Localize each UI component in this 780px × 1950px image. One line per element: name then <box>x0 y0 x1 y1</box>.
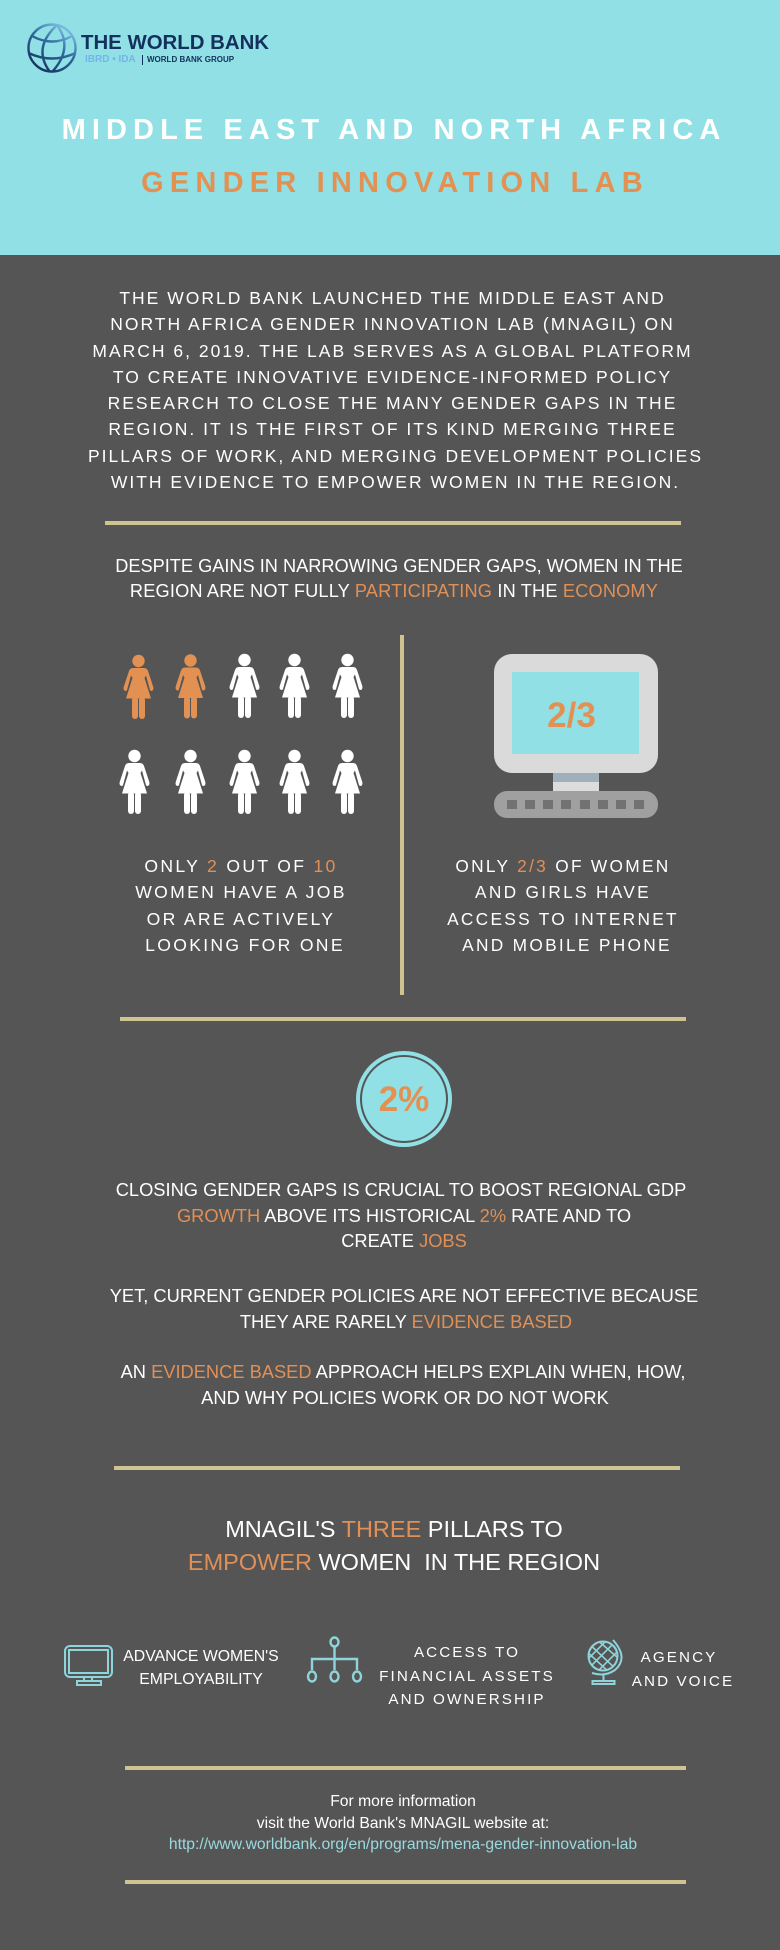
logo: The World Bank <box>27 23 269 73</box>
pillar 1 label: ADVANCE WOMEN'S <box>123 1648 279 1665</box>
pillar 3 label <box>632 1649 734 1690</box>
intro paragraph: PILLARS OF WORK, AND MERGING DEVELOPMENT POLICIES <box>88 446 703 466</box>
intro paragraph <box>88 288 703 492</box>
heading: three pillars: EMPOWER WOMEN IN THE REGION <box>188 1548 600 1574</box>
pillar 3 label: AND VOICE <box>632 1672 734 1690</box>
text: only 2/3 of women: AND MOBILE PHONE <box>462 935 672 955</box>
intro paragraph: REGION. IT IS THE FIRST OF ITS KIND MERGING THREE <box>108 419 677 439</box>
text: only 2 out of 10: ONLY 2 OUT OF 10 <box>144 856 338 876</box>
pillar 2 label <box>379 1644 555 1708</box>
neck <box>553 773 599 791</box>
footer: more information: For more information <box>330 1793 476 1810</box>
icon: org network <box>306 1636 362 1683</box>
icon: desk globe <box>588 1640 622 1685</box>
woman 1 (orange) <box>124 654 154 719</box>
footer: more information: http://www.worldbank.org/en/programs/mena-gender-innovation-lab <box>169 1836 637 1853</box>
separator <box>142 55 143 65</box>
pillar 1 label <box>123 1648 279 1688</box>
pictogram: 2 of 10 women <box>120 654 362 814</box>
pillar 2 label: ACCESS TO <box>414 1644 520 1661</box>
World Bank Group: WORLD BANK GROUP <box>147 55 234 64</box>
paragraph: closing gender gaps <box>116 1179 686 1251</box>
intro paragraph: WITH EVIDENCE TO EMPOWER WOMEN IN THE REGION. <box>111 472 680 492</box>
monitor <box>494 654 658 773</box>
subheading: participation: DESPITE GAINS IN NARROWING GENDER GAPS, WOMEN IN THE <box>115 556 683 576</box>
intro paragraph: RESEARCH TO CLOSE THE MANY GENDER GAPS IN THE <box>108 393 677 413</box>
text: only 2/3 of women: ACCESS TO INTERNET <box>447 909 679 929</box>
text: only 2/3 of women <box>447 856 679 955</box>
woman 9 <box>280 750 310 814</box>
woman 7 <box>176 750 206 814</box>
badge ring <box>360 1055 448 1143</box>
intro paragraph: TO CREATE INNOVATIVE EVIDENCE-INFORMED POLICY <box>113 367 672 387</box>
title line 2: GENDER INNOVATION LAB <box>141 167 649 199</box>
footer: more information: visit the World Bank's MNAGIL website at: <box>257 1815 549 1832</box>
paragraph: closing gender gaps: GROWTH ABOVE ITS HISTORICAL 2% RATE AND TO <box>177 1205 631 1226</box>
text: only 2/3 of women: ONLY 2/3 OF WOMEN <box>455 856 671 876</box>
footer: more information <box>169 1793 637 1853</box>
keyboard <box>494 791 658 818</box>
paragraph: evidence based approach: AN EVIDENCE BASED APPROACH HELPS EXPLAIN WHEN, HOW, <box>121 1361 685 1382</box>
screen <box>512 672 639 754</box>
heading: three pillars: MNAGIL'S THREE PILLARS TO <box>225 1516 563 1542</box>
logo wordmark: THE WORLD BANK <box>81 32 269 54</box>
pillar 2 label: AND OWNERSHIP <box>388 1691 546 1708</box>
pillar 3 label: AGENCY <box>641 1649 717 1666</box>
woman 2 (orange) <box>176 654 206 718</box>
header band <box>0 0 780 255</box>
icon: globe <box>27 23 77 73</box>
icon: computer with 2/3 <box>494 654 658 818</box>
subheading: participation: REGION ARE NOT FULLY PARTICIPATING IN THE ECONOMY <box>130 581 658 601</box>
intro paragraph: THE WORLD BANK LAUNCHED THE MIDDLE EAST AND <box>119 288 666 308</box>
pillar 2 label: FINANCIAL ASSETS <box>379 1668 555 1684</box>
pillar 1 label: EMPLOYABILITY <box>139 1670 263 1688</box>
woman 6 <box>120 750 150 814</box>
icon: monitor <box>64 1645 113 1686</box>
pillar 3: agency <box>588 1640 734 1690</box>
vertical divider <box>400 635 404 995</box>
woman 4 <box>280 654 310 718</box>
woman 5 <box>332 654 362 718</box>
paragraph: evidence based approach <box>120 1361 685 1408</box>
text: only 2 out of 10: LOOKING FOR ONE <box>145 935 345 955</box>
paragraph: current gender policies: YET, CURRENT GENDER POLICIES ARE NOT EFFECTIVE BECAUSE <box>110 1285 698 1306</box>
logo sub-line <box>85 54 234 65</box>
pillar 2: assets <box>306 1636 555 1708</box>
paragraph: evidence based approach: AND WHY POLICIES WORK OR DO NOT WORK <box>201 1387 609 1408</box>
pillar 1: employability <box>64 1645 279 1688</box>
text: only 2/3 of women: AND GIRLS HAVE <box>475 882 651 902</box>
woman 10 <box>332 750 362 814</box>
IBRD IDA: IBRD • IDA <box>85 54 136 65</box>
stat 2/3: 2/3 <box>547 696 596 735</box>
heading: three pillars <box>188 1516 600 1574</box>
badge: 2% <box>356 1051 452 1147</box>
text: only 2 out of 10: OR ARE ACTIVELY <box>147 909 335 929</box>
text: only 2 out of 10: WOMEN HAVE A JOB <box>135 882 347 902</box>
title line 1: MIDDLE EAST AND NORTH AFRICA <box>62 114 726 146</box>
paragraph: current gender policies: THEY ARE RARELY EVIDENCE BASED <box>240 1311 572 1332</box>
paragraph: closing gender gaps: CREATE JOBS <box>341 1230 467 1251</box>
paragraph: current gender policies <box>110 1285 698 1332</box>
woman 8 <box>230 750 260 814</box>
text: only 2 out of 10 <box>135 856 347 955</box>
subheading: participation <box>115 556 683 601</box>
paragraph: closing gender gaps: CLOSING GENDER GAPS IS CRUCIAL TO BOOST REGIONAL GDP <box>116 1179 686 1200</box>
woman 3 <box>230 654 260 718</box>
intro paragraph: MARCH 6, 2019. THE LAB SERVES AS A GLOBAL PLATFORM <box>92 341 693 361</box>
badge value: 2% <box>379 1080 429 1119</box>
intro paragraph: NORTH AFRICA GENDER INNOVATION LAB (MNAGIL) ON <box>110 314 675 334</box>
